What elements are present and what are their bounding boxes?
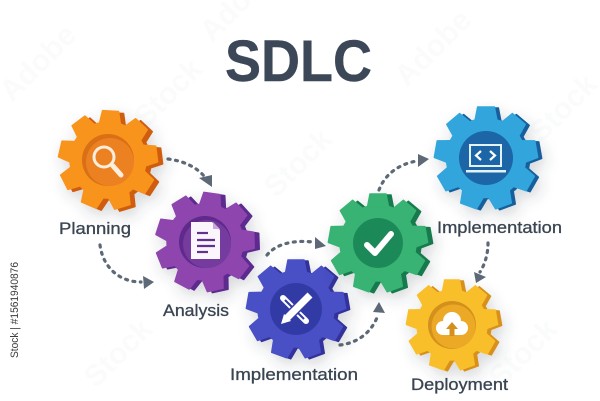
- arrow: implementation to testing: [340, 302, 385, 345]
- icon: document: [191, 222, 220, 259]
- arrow: blue gear to deployment: [474, 243, 488, 283]
- gear: planning: [55, 108, 166, 214]
- watermark: Stock: [78, 313, 159, 394]
- icon: check mark: [367, 234, 391, 253]
- arrow: analysis to testing: [267, 237, 326, 255]
- label: implementation: Implementation: [230, 366, 358, 384]
- stock id: Stock | #1561940876: [9, 262, 21, 358]
- label: analysis: Analysis: [163, 302, 229, 320]
- watermark: Stock: [483, 313, 564, 394]
- gear: deployment: [406, 280, 502, 372]
- arrow: testing to blue gear: [379, 154, 429, 190]
- arrow: planning to analysis top: [168, 159, 212, 187]
- watermark: Adobe: [389, 4, 478, 93]
- arrow: planning to analysis bottom: [100, 245, 154, 289]
- label: deployment: Deployment: [411, 376, 508, 394]
- label: implementation upper: Implementation: [437, 219, 562, 237]
- icon: pencil and ruler: [281, 295, 310, 324]
- gear: implementation: [246, 260, 350, 360]
- title: SDLC: [225, 29, 372, 94]
- watermark: Stock: [258, 123, 339, 204]
- gear: analysis: [149, 187, 266, 299]
- watermark: Stock: [128, 53, 209, 134]
- label: planning: Planning: [59, 220, 131, 238]
- icon: cloud upload: [436, 312, 468, 336]
- gear: testing: [328, 194, 433, 294]
- icon: laptop with code: [466, 145, 506, 172]
- gear: blue implementation: [434, 107, 542, 211]
- icon: magnifier: [94, 147, 121, 175]
